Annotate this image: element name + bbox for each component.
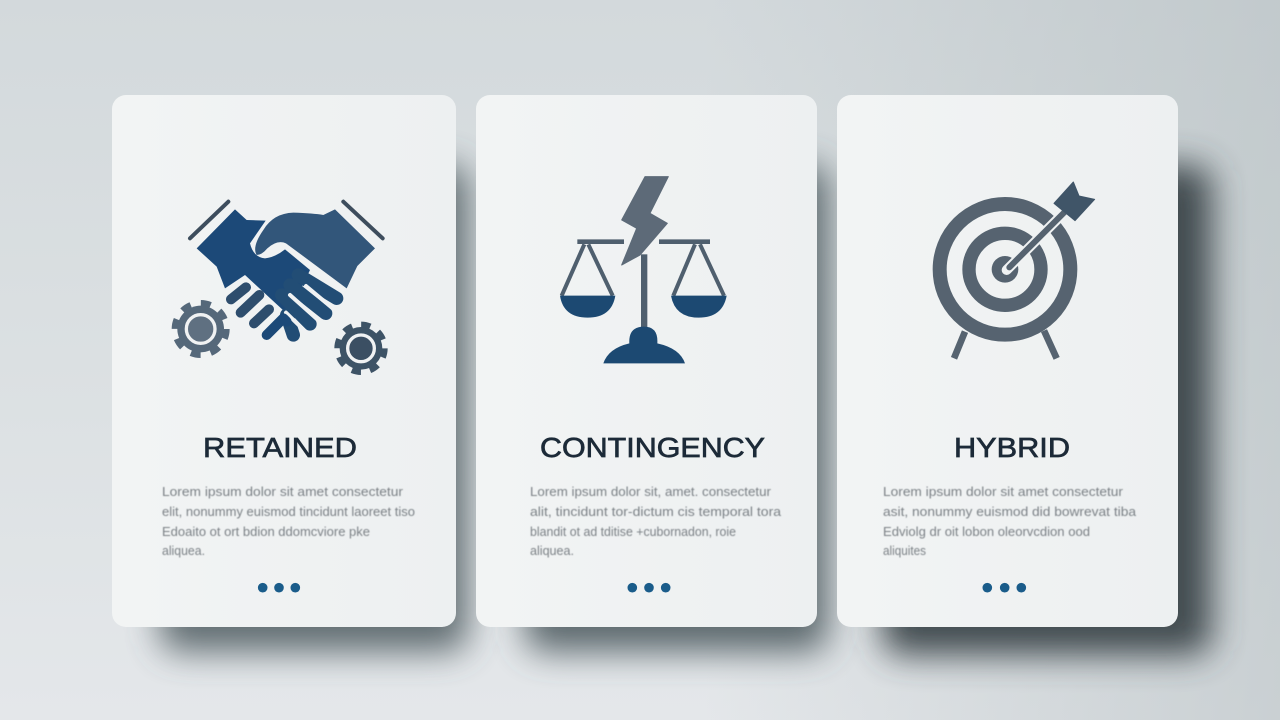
heading: retained: RETAINED	[203, 432, 357, 463]
card shadows	[160, 165, 1212, 655]
body text: contingency: blandit ot ad tditise +cubornadon, roie	[530, 525, 736, 539]
body text: retained: aliquea.	[162, 544, 205, 558]
body text: hybrid: aliquites	[883, 544, 926, 558]
body text: contingency: Lorem ipsum dolor sit, amet. consectetur	[530, 485, 771, 499]
heading: contingency: CONTINGENCY	[540, 432, 765, 463]
body text: retained: Edoaito ot ort bdion ddomcviore pke	[162, 525, 370, 539]
body text: contingency: alit, tincidunt tor-dictum cis temporal tora	[530, 505, 781, 519]
icon: scales with lightning bolt	[560, 177, 727, 363]
body text: contingency: aliquea.	[530, 544, 574, 558]
body text: hybrid: Lorem ipsum dolor sit amet consectetur	[883, 485, 1123, 499]
body text: retained: Lorem ipsum dolor sit amet consectetur	[162, 485, 403, 499]
icon: handshake with gears	[175, 202, 385, 372]
pagination dots: retained	[258, 583, 300, 592]
body text: retained	[162, 485, 415, 558]
body text: hybrid: Edviolg dr oit lobon oleorvcdion ood	[883, 525, 1090, 539]
pagination dots: contingency	[628, 583, 670, 592]
panel: contingency	[476, 95, 817, 627]
body text: contingency	[530, 485, 781, 558]
icon: target with arrow	[940, 182, 1095, 358]
pagination dots: hybrid	[982, 583, 1026, 592]
body text: hybrid	[883, 485, 1136, 558]
heading: hybrid: HYBRID	[954, 432, 1070, 463]
body text: hybrid: asit, nonummy euismod did bowrevat tiba	[883, 505, 1136, 519]
panel: hybrid	[837, 95, 1178, 627]
body text: retained: elit, nonummy euismod tincidunt laoreet tiso	[162, 505, 415, 519]
panel: retained	[112, 95, 456, 627]
